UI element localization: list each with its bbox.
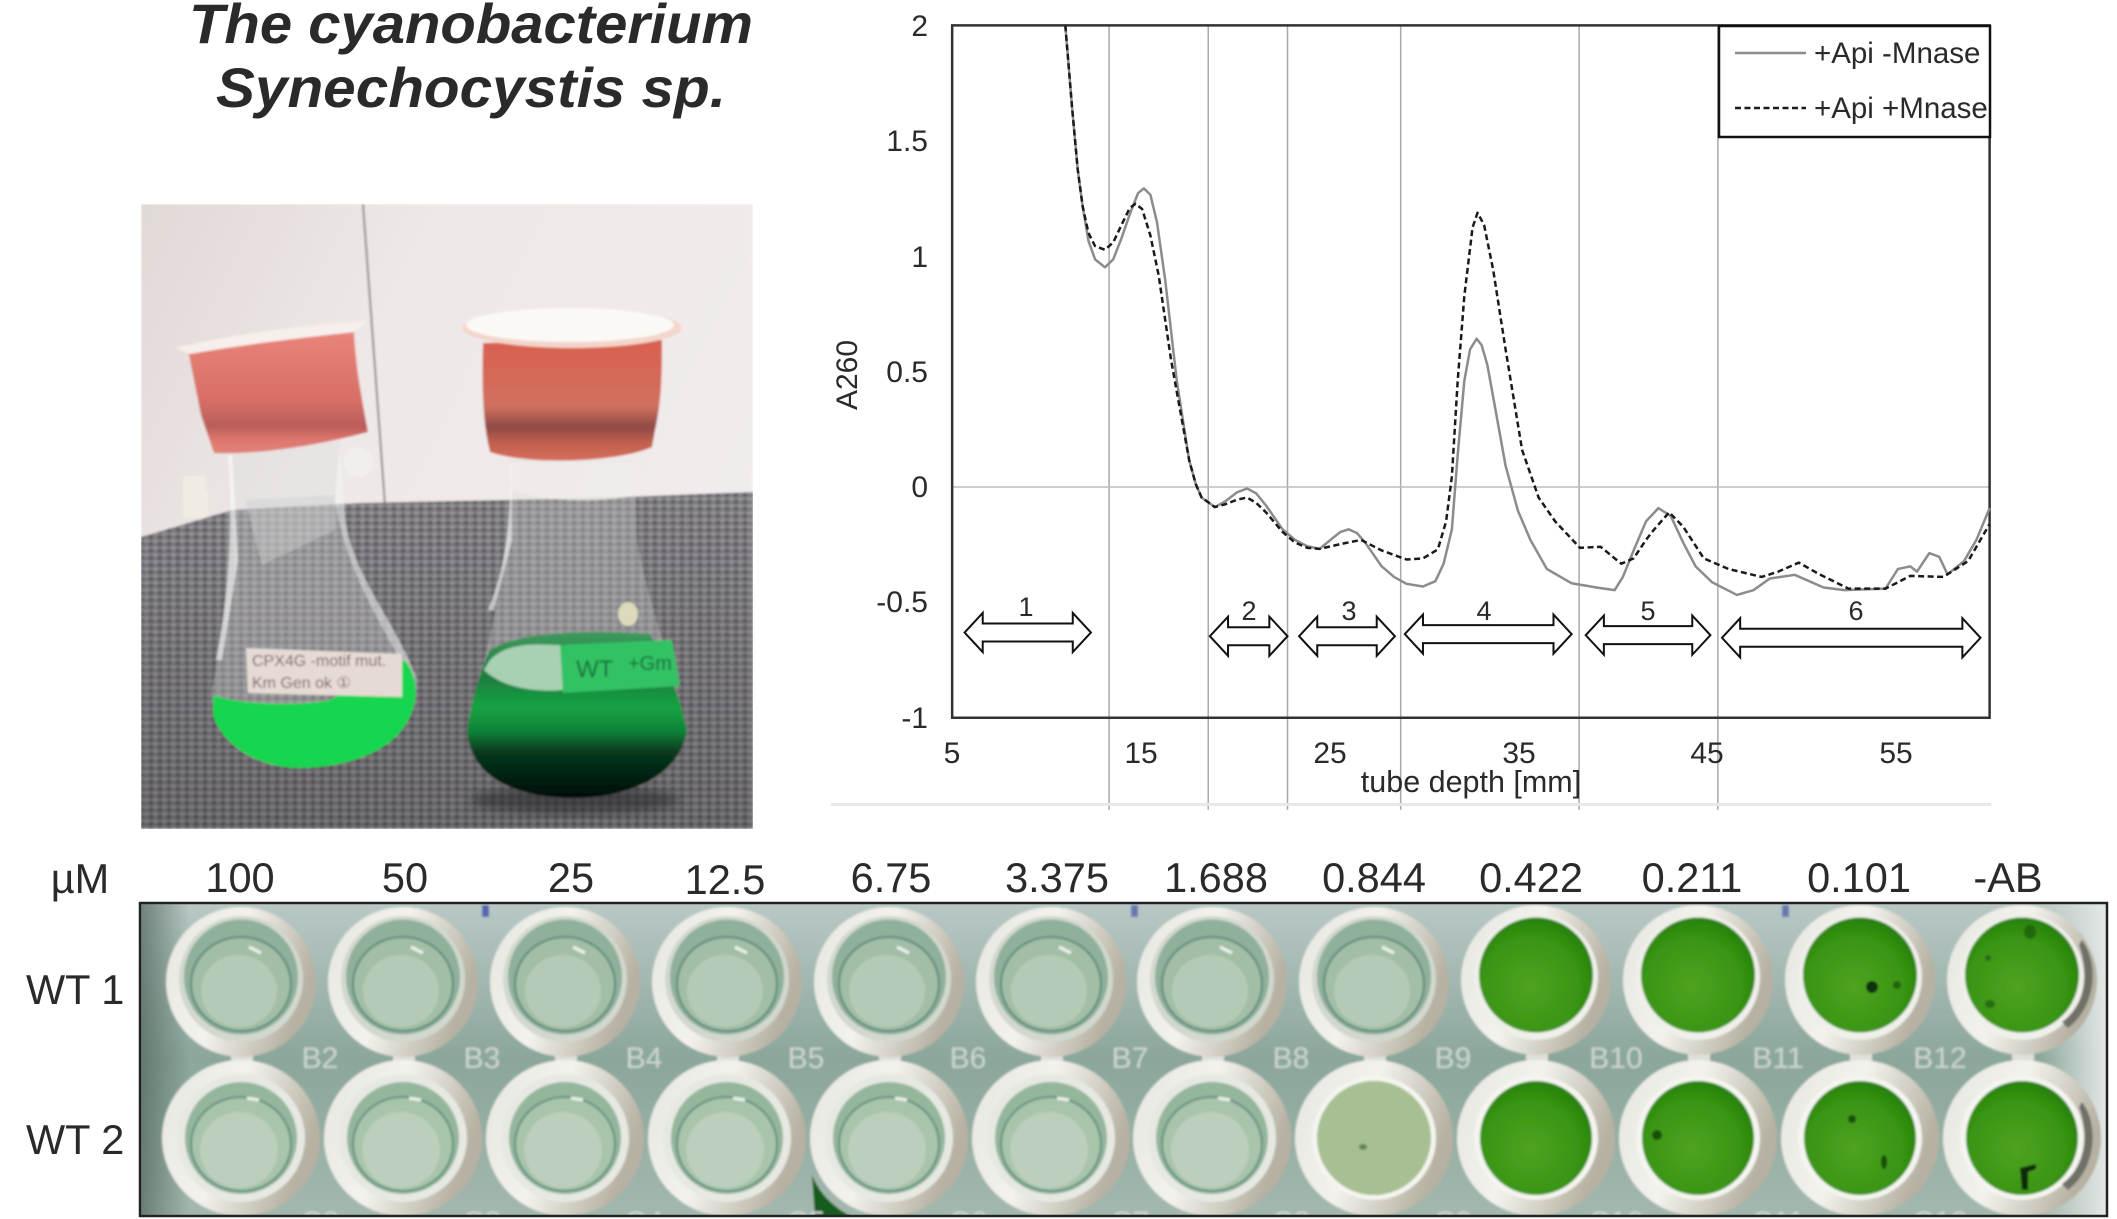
- fraction numbers: 6: [1848, 596, 1864, 626]
- y axis tick labels: -1: [901, 702, 928, 735]
- line chart: A260 vs tube depth: [831, 10, 1991, 810]
- title: Synechocystis sp.: [216, 56, 726, 119]
- concentration labels: µM: [51, 855, 109, 902]
- row 1 wells: [166, 905, 2097, 1057]
- fraction numbers: 2: [1241, 596, 1257, 626]
- y axis tick labels: [876, 10, 928, 735]
- concentration labels: 0.211: [1642, 854, 1742, 901]
- series: +Api +Mnase: [1065, 25, 1990, 589]
- concentration labels: 50: [382, 854, 428, 901]
- concentration labels: 3.375: [1005, 854, 1109, 901]
- left flask: Km Gen ok ①: [252, 675, 351, 692]
- fraction numbers: 4: [1476, 596, 1492, 626]
- plate frame: [140, 903, 2107, 1216]
- y axis tick labels: 2: [911, 10, 928, 43]
- well position numbers: B3: [464, 1042, 500, 1075]
- series: +Api -Mnase: [1065, 25, 1990, 595]
- legend: +Api -Mnase: [1814, 37, 1980, 70]
- y axis tick labels: 1: [911, 241, 928, 274]
- concentration labels: 1.688: [1164, 854, 1268, 901]
- concentration labels: 0.422: [1479, 854, 1583, 901]
- fraction arrows: [965, 613, 1981, 657]
- well position numbers: B8: [1273, 1042, 1309, 1075]
- y axis title: A260: [831, 340, 864, 410]
- right flask: WT: [576, 656, 614, 683]
- dark green wedge under well: [812, 1175, 852, 1217]
- concentration labels: 100: [205, 854, 275, 901]
- fraction numbers: 1: [1018, 592, 1034, 622]
- left flask: [175, 321, 417, 768]
- y axis tick labels: 0: [911, 471, 928, 504]
- x axis tick labels: 55: [1879, 737, 1913, 770]
- concentration labels: 0.844: [1322, 854, 1426, 901]
- legend: [1719, 26, 1990, 137]
- fraction numbers: [1018, 592, 1864, 626]
- concentration labels: [51, 854, 2043, 903]
- dark specks in wells: [1359, 925, 2036, 1190]
- fraction numbers: 3: [1341, 596, 1357, 626]
- well position numbers: B2: [302, 1042, 338, 1075]
- well plate photo: [140, 903, 2107, 1219]
- well position numbers: B9: [1435, 1042, 1471, 1075]
- concentration labels: 25: [548, 854, 594, 901]
- y axis tick labels: -0.5: [876, 586, 928, 619]
- row 2 wells: [162, 1060, 2101, 1216]
- x axis tick labels: 5: [944, 737, 960, 770]
- left flask: CPX4G -motif mut.: [252, 653, 386, 670]
- concentration labels: 6.75: [851, 854, 931, 901]
- row label: WT 1: WT 1: [26, 966, 124, 1013]
- well position numbers: B7: [1112, 1042, 1148, 1075]
- well position numbers: B10: [1589, 1042, 1643, 1075]
- connecting tabs between rows: [230, 1053, 2036, 1062]
- well position numbers: [301, 1042, 1968, 1219]
- x axis tick labels: [944, 737, 1913, 770]
- x axis tick labels: 25: [1313, 737, 1347, 770]
- concentration labels: -AB: [1973, 854, 2043, 901]
- photo: two flasks of cyanobacteria culture: [141, 204, 753, 829]
- well position numbers: B5: [788, 1042, 824, 1075]
- concentration labels: 0.101: [1807, 854, 1911, 901]
- shadow crescents on last column wells: [2062, 940, 2093, 1190]
- title: [189, 0, 753, 119]
- right flask: [462, 308, 687, 814]
- well position numbers: B4: [626, 1042, 662, 1075]
- x axis title: tube depth [mm]: [1361, 765, 1581, 799]
- x axis tick labels: 45: [1690, 737, 1724, 770]
- x axis tick labels: 15: [1124, 737, 1158, 770]
- fraction numbers: 5: [1640, 596, 1656, 626]
- well position numbers: B6: [950, 1042, 986, 1075]
- legend: +Api +Mnase: [1814, 92, 1988, 125]
- concentration labels: 12.5: [685, 856, 765, 903]
- y axis tick labels: 0.5: [886, 356, 928, 389]
- well position numbers: B12: [1913, 1042, 1967, 1075]
- right flask: +Gm: [628, 653, 672, 675]
- row label: WT 2: WT 2: [26, 1116, 124, 1163]
- y axis tick labels: 1.5: [886, 125, 928, 158]
- x axis tick labels: 35: [1502, 737, 1536, 770]
- chart plot area: [831, 25, 1991, 810]
- well position numbers: B11: [1752, 1042, 1804, 1075]
